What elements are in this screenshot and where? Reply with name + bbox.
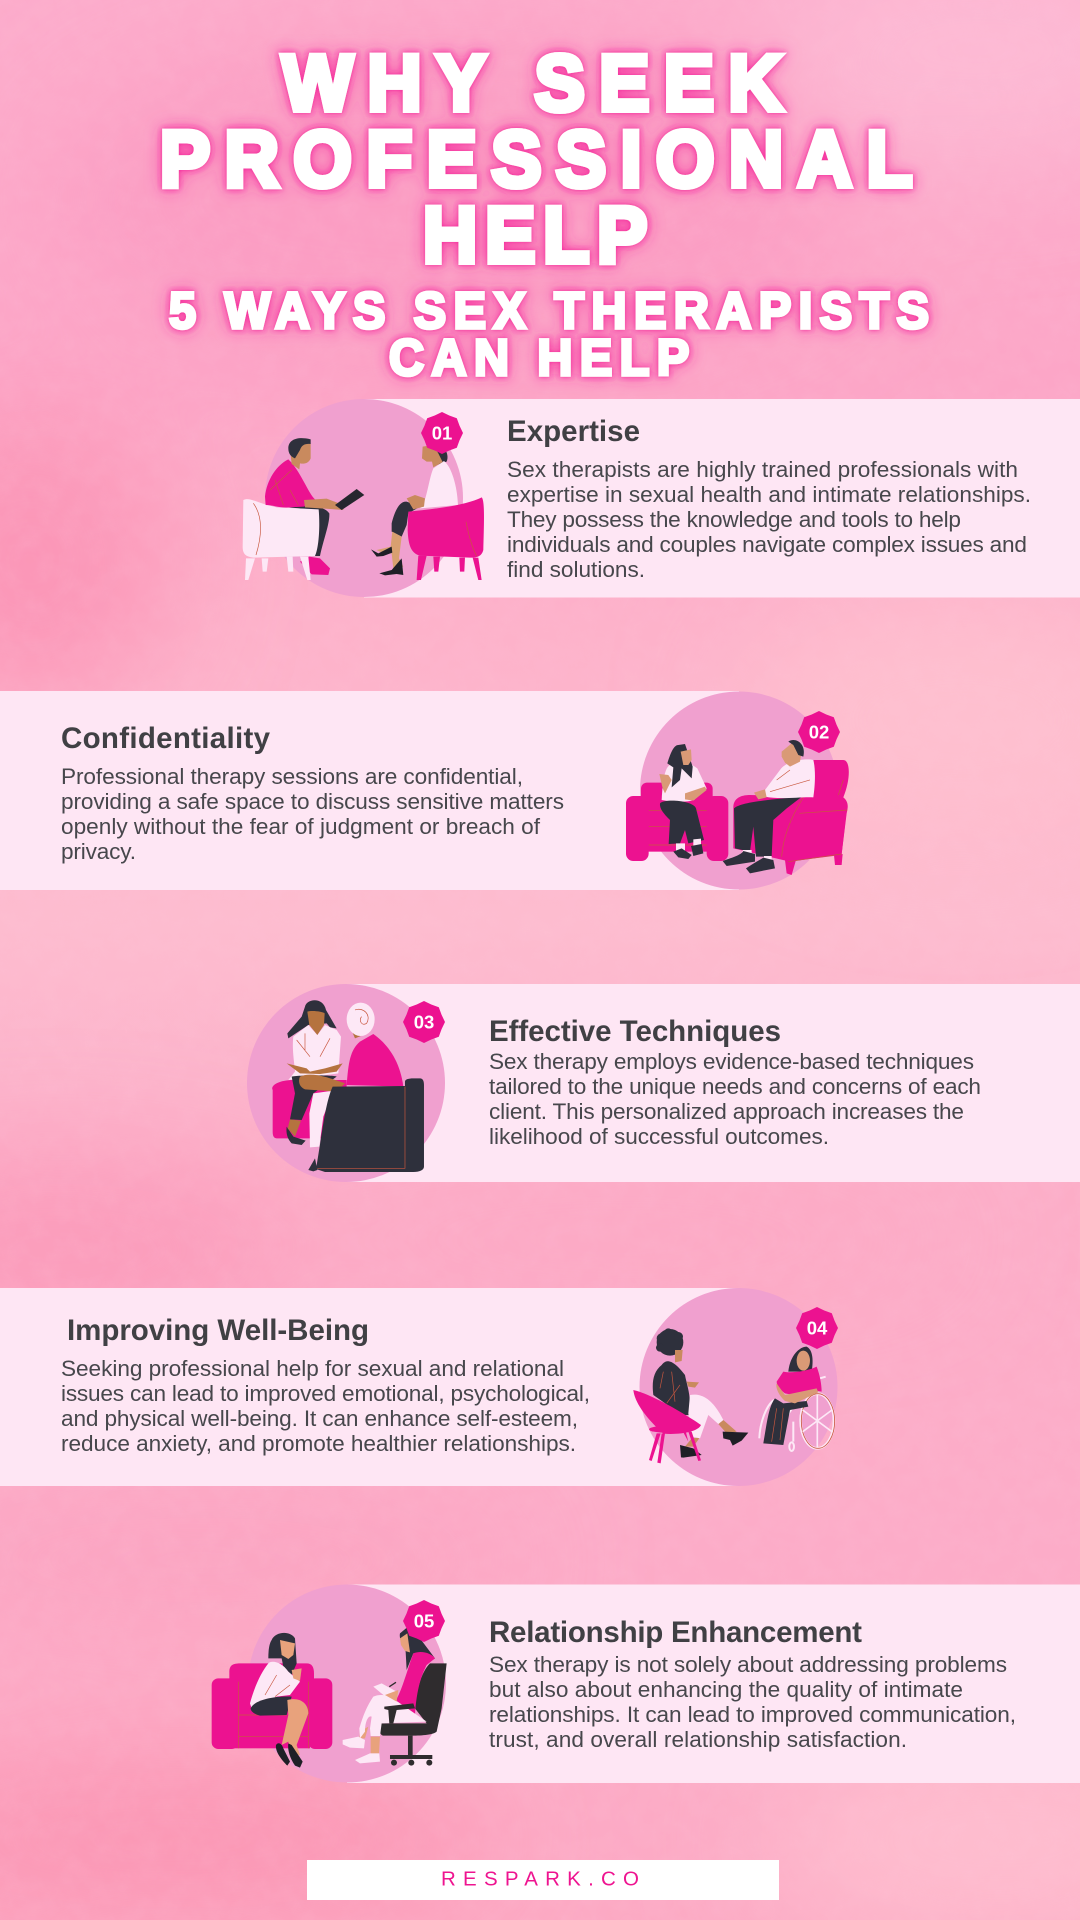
illustration: two women talking, dark armchair: [272, 1000, 424, 1172]
illustration: woman on sofa, therapist on office chair: [212, 1625, 447, 1768]
circle 5: [248, 1584, 446, 1782]
title: WHY SEEK: [282, 39, 783, 127]
body text 2: Professional therapy sessions are confidential,: [61, 764, 523, 789]
title: HELP: [423, 191, 647, 279]
body text 2: openly without the fear of judgment or breach of: [61, 814, 541, 839]
body text 4: and physical well-being. It can enhance self-esteem,: [61, 1406, 578, 1431]
subtitle: [169, 282, 929, 386]
badge 03: 03: [414, 1012, 434, 1032]
body text 2: [61, 764, 564, 864]
panel: 01 expertise: [243, 399, 1080, 598]
badge 01: 01: [432, 422, 452, 444]
circle 1: [265, 399, 463, 597]
badge 04: 04: [807, 1318, 828, 1338]
body text 5: [489, 1652, 1016, 1752]
band 1: [364, 399, 1080, 598]
body text 3: [489, 1049, 981, 1149]
body text 1: expertise in sexual health and intimate relationships.: [507, 482, 1031, 507]
subtitle: CAN HELP: [389, 329, 689, 386]
panel: 05 relationship enhancement: [212, 1584, 1080, 1783]
badge 02: [798, 711, 840, 753]
band 4: [0, 1288, 739, 1486]
body text 1: Sex therapists are highly trained professionals with: [507, 457, 1018, 482]
circle 4: [640, 1288, 838, 1486]
illustration: woman and man in magenta armchairs: [626, 740, 849, 875]
heading: Relationship Enhancement: Relationship Enhancement: [489, 1616, 862, 1649]
heading: Improving Well-Being: Improving Well-Being: [67, 1314, 369, 1347]
body text 5: relationships. It can lead to improved communication,: [489, 1702, 1016, 1727]
title: PROFESSIONAL: [160, 115, 912, 203]
heading: Confidentiality: Confidentiality: [61, 722, 271, 755]
panel: 02 confidentiality: [0, 691, 849, 890]
body text 1: individuals and couples navigate complex issues and: [507, 532, 1027, 557]
badge 04: [796, 1307, 838, 1349]
badge 05: 05: [414, 1610, 434, 1632]
circle 3: [247, 984, 445, 1182]
body text 2: providing a safe space to discuss sensitive matters: [61, 789, 564, 814]
heading: Effective Techniques: Effective Techniques: [489, 1015, 781, 1048]
body text 4: issues can lead to improved emotional, psychological,: [61, 1381, 590, 1406]
panel: 04 improving well-being: [0, 1288, 838, 1486]
footer: respark.co: [307, 1860, 779, 1900]
body text 3: tailored to the unique needs and concerns of each: [489, 1074, 981, 1099]
body text 3: client. This personalized approach increases the: [489, 1099, 964, 1124]
body text 1: They possess the knowledge and tools to help: [507, 507, 961, 532]
body text 3: likelihood of successful outcomes.: [489, 1124, 829, 1149]
panel: 03 effective techniques: [247, 984, 1080, 1182]
body text 5: trust, and overall relationship satisfaction.: [489, 1727, 907, 1752]
body text 4: [61, 1356, 590, 1456]
body text 1: find solutions.: [507, 557, 645, 582]
body text 3: Sex therapy employs evidence-based techniques: [489, 1049, 974, 1074]
circle 2: [640, 692, 838, 890]
band 2: [0, 691, 739, 890]
band 3: [346, 984, 1080, 1182]
badge 03: [403, 1001, 445, 1043]
heading: Expertise: Expertise: [507, 415, 640, 448]
illustration: man and woman in armchairs: [243, 438, 484, 580]
body text 5: but also about enhancing the quality of intimate: [489, 1677, 963, 1702]
badge 05: [403, 1600, 445, 1642]
footer: respark.co: RESPARK.CO: [441, 1868, 639, 1890]
body text 5: Sex therapy is not solely about addressing problems: [489, 1652, 1007, 1677]
subtitle: 5 WAYS SEX THERAPISTS: [169, 282, 929, 339]
body text 1: [507, 457, 1031, 582]
body text 4: Seeking professional help for sexual and relational: [61, 1356, 564, 1381]
badge 02: 02: [809, 722, 829, 742]
title: [160, 39, 912, 279]
badge 01: [421, 412, 463, 454]
body text 2: privacy.: [61, 839, 136, 864]
band 5: [347, 1584, 1080, 1783]
illustration: woman on pink chair, woman in wheelchair: [633, 1328, 835, 1463]
body text 4: reduce anxiety, and promote healthier relationships.: [61, 1431, 576, 1456]
